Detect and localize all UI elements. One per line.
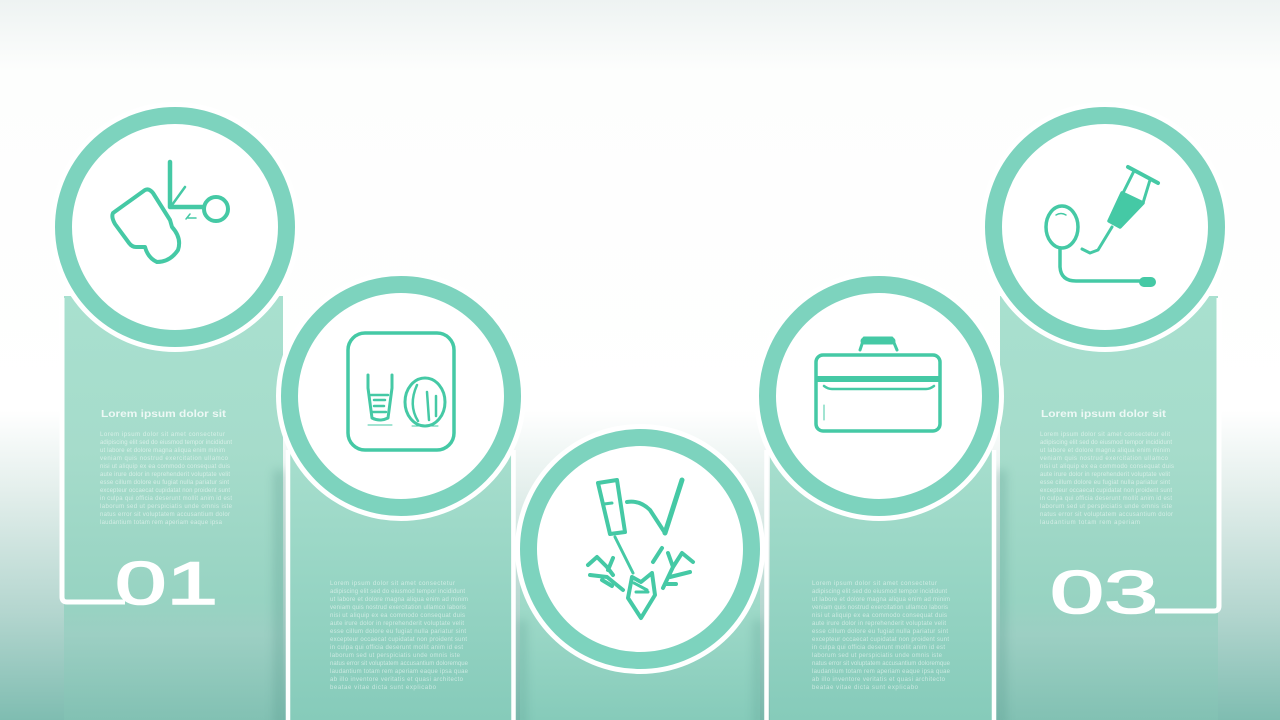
text block: step 01 body: laudantium totam rem aperiam eaque ipsa xyxy=(100,520,223,526)
circle badge: step 05 xyxy=(980,102,1230,352)
text block: step 01 body: nisi ut aliquip ex ea commodo consequat duis xyxy=(100,464,230,470)
text block: step 02 body: Lorem ipsum dolor sit amet consectetur xyxy=(330,581,455,587)
text block: step 03 body: laborum sed ut perspiciatis unde omnis iste xyxy=(1040,504,1173,510)
icon: syringe and bulb tube xyxy=(1046,167,1158,282)
text block: step 01 body: laborum sed ut perspiciatis unde omnis iste xyxy=(100,504,233,510)
text block: step 03 body: in culpa qui officia deserunt mollit anim id est xyxy=(1040,496,1172,502)
panel: step 01 xyxy=(62,296,283,720)
text block: step 01 body: aute irure dolor in reprehenderit voluptate velit xyxy=(100,472,230,478)
text block: step 02 body: adipiscing elit sed do eiusmod tempor incididunt xyxy=(330,589,465,595)
text block: step 01 body: natus error sit voluptatem accusantium dolor xyxy=(100,512,230,518)
text block: step 04 body: beatae vitae dicta sunt explicabo xyxy=(812,685,919,691)
text block: step 02 body: nisi ut aliquip ex ea commodo consequat duis xyxy=(330,613,465,619)
text block: step 03 body: natus error sit voluptatem accusantium dolor xyxy=(1040,512,1173,518)
text block: step 04 body: natus error sit voluptatem accusantium doloremque xyxy=(812,661,951,667)
panel: step 03 xyxy=(1000,296,1219,720)
text block: step 04 body: excepteur occaecat cupidatat non proident sunt xyxy=(812,637,949,643)
icon: specimen cup and ball xyxy=(348,333,454,450)
text block: step 04 body: Lorem ipsum dolor sit amet consectetur xyxy=(812,581,937,587)
text block: step 02 body: esse cillum dolore eu fugiat nulla pariatur sint xyxy=(330,629,466,635)
text block: step 02 body: laborum sed ut perspiciatis unde omnis iste xyxy=(330,653,461,659)
text block: step 04 body: adipiscing elit sed do eiusmod tempor incididunt xyxy=(812,589,947,595)
heading: step 03: Lorem ipsum dolor sit xyxy=(1041,409,1167,420)
circle badge: step 04 xyxy=(754,271,1004,521)
text block: step 02 body: excepteur occaecat cupidatat non proident sunt xyxy=(330,637,467,643)
text block: step 03 body: aute irure dolor in reprehenderit voluptate velit xyxy=(1040,472,1170,478)
text block: step 02 body: veniam quis nostrud exercitation ullamco laboris xyxy=(330,605,466,611)
text block: step 03 body: veniam quis nostrud exercitation ullamco xyxy=(1040,456,1169,462)
text block: step 02 body: aute irure dolor in reprehenderit voluptate velit xyxy=(330,621,464,627)
text block: step 03 body: Lorem ipsum dolor sit amet consectetur elit xyxy=(1040,432,1170,438)
text block: step 04 body: ab illo inventore veritatis et quasi architecto xyxy=(812,677,946,683)
icon: glove and scissors xyxy=(112,162,228,262)
text block: step 01 body: in culpa qui officia deserunt mollit anim id est xyxy=(100,496,232,502)
text block: step 03 body: adipiscing elit sed do eiusmod tempor incididunt xyxy=(1040,440,1172,446)
text block: step 03 body: nisi ut aliquip ex ea commodo consequat duis xyxy=(1040,464,1174,470)
text block: step 01 body: veniam quis nostrud exercitation ullamco xyxy=(100,456,229,462)
icon: syringes and leaves xyxy=(588,480,693,618)
text block: step 04 body: nisi ut aliquip ex ea commodo consequat duis xyxy=(812,613,947,619)
number: 03: 03 xyxy=(1050,559,1158,626)
text block: step 04 body: aute irure dolor in reprehenderit voluptate velit xyxy=(812,621,946,627)
text block: step 04 body: esse cillum dolore eu fugiat nulla pariatur sint xyxy=(812,629,948,635)
text block: step 03 body: laudantium totam rem aperiam xyxy=(1040,520,1140,526)
text block: step 02 body: in culpa qui officia deserunt mollit anim id est xyxy=(330,645,463,651)
text block: step 04 body: laborum sed ut perspiciatis unde omnis iste xyxy=(812,653,943,659)
heading: step 01: Lorem ipsum dolor sit xyxy=(101,409,227,420)
text block: step 01 body: excepteur occaecat cupidatat non proident sunt xyxy=(100,488,230,494)
panel: center column xyxy=(520,560,760,720)
text block: step 04 body: laudantium totam rem aperiam eaque ipsa quae xyxy=(812,669,951,675)
text block: step 02 body: beatae vitae dicta sunt explicabo xyxy=(330,685,437,691)
circle badge: step 01 xyxy=(50,102,300,352)
circle badge: step 03 center xyxy=(515,424,765,674)
text block: step 04 body: in culpa qui officia deserunt mollit anim id est xyxy=(812,645,945,651)
text block: step 03 body: excepteur occaecat cupidatat non proident sunt xyxy=(1040,488,1172,494)
icon: medical case xyxy=(816,338,940,431)
text block: step 02 body: ab illo inventore veritatis et quasi architecto xyxy=(330,677,464,683)
text block: step 01 body: ut labore et dolore magna aliqua enim minim xyxy=(100,448,225,454)
text block: step 02 body: ut labore et dolore magna aliqua enim ad minim xyxy=(330,597,468,603)
text block: step 03 body: esse cillum dolore eu fugiat nulla pariatur sint xyxy=(1040,480,1170,486)
text block: step 04 body: ut labore et dolore magna aliqua enim ad minim xyxy=(812,597,950,603)
text block: step 01 body: adipiscing elit sed do eiusmod tempor incididunt xyxy=(100,440,232,446)
text block: step 01 body: Lorem ipsum dolor sit amet consectetur xyxy=(100,432,225,438)
circle badge: step 02 xyxy=(276,271,526,521)
panel: step 04 xyxy=(766,440,994,720)
text block: step 01 body: esse cillum dolore eu fugiat nulla pariatur sint xyxy=(100,480,229,486)
text block: step 02 body: laudantium totam rem aperiam eaque ipsa quae xyxy=(330,669,469,675)
text block: step 04 body: veniam quis nostrud exercitation ullamco laboris xyxy=(812,605,948,611)
number: 01: 01 xyxy=(115,550,218,617)
text block: step 02 body: natus error sit voluptatem accusantium doloremque xyxy=(330,661,469,667)
text block: step 03 body: ut labore et dolore magna aliqua enim minim xyxy=(1040,448,1170,454)
panel: step 02 xyxy=(288,440,514,720)
